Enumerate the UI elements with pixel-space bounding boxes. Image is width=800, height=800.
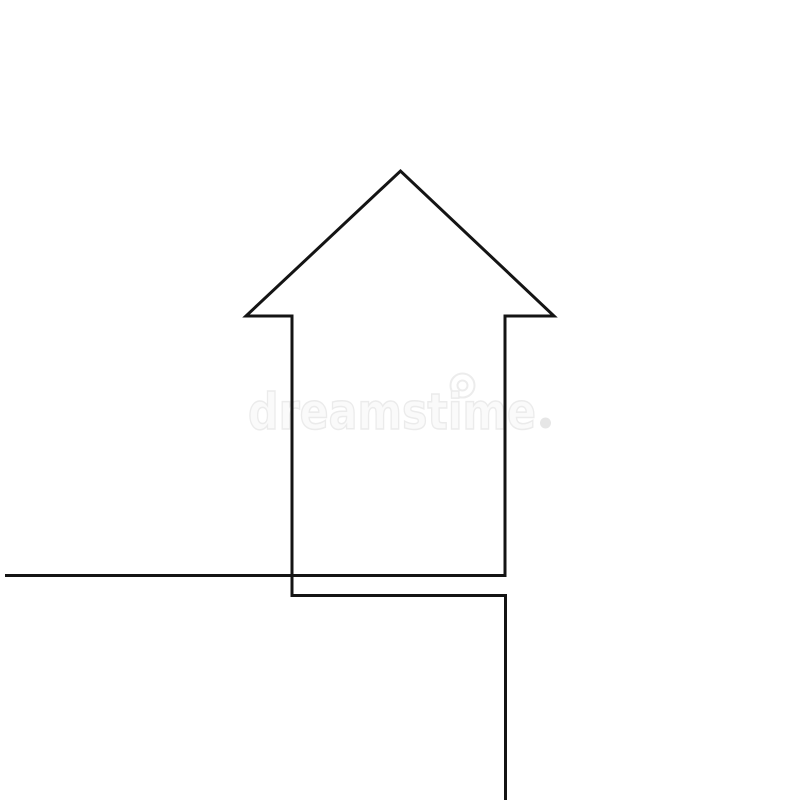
watermark: dreamstime: dreamstime xyxy=(248,383,536,441)
icon: one-line upward arrow xyxy=(5,171,554,800)
